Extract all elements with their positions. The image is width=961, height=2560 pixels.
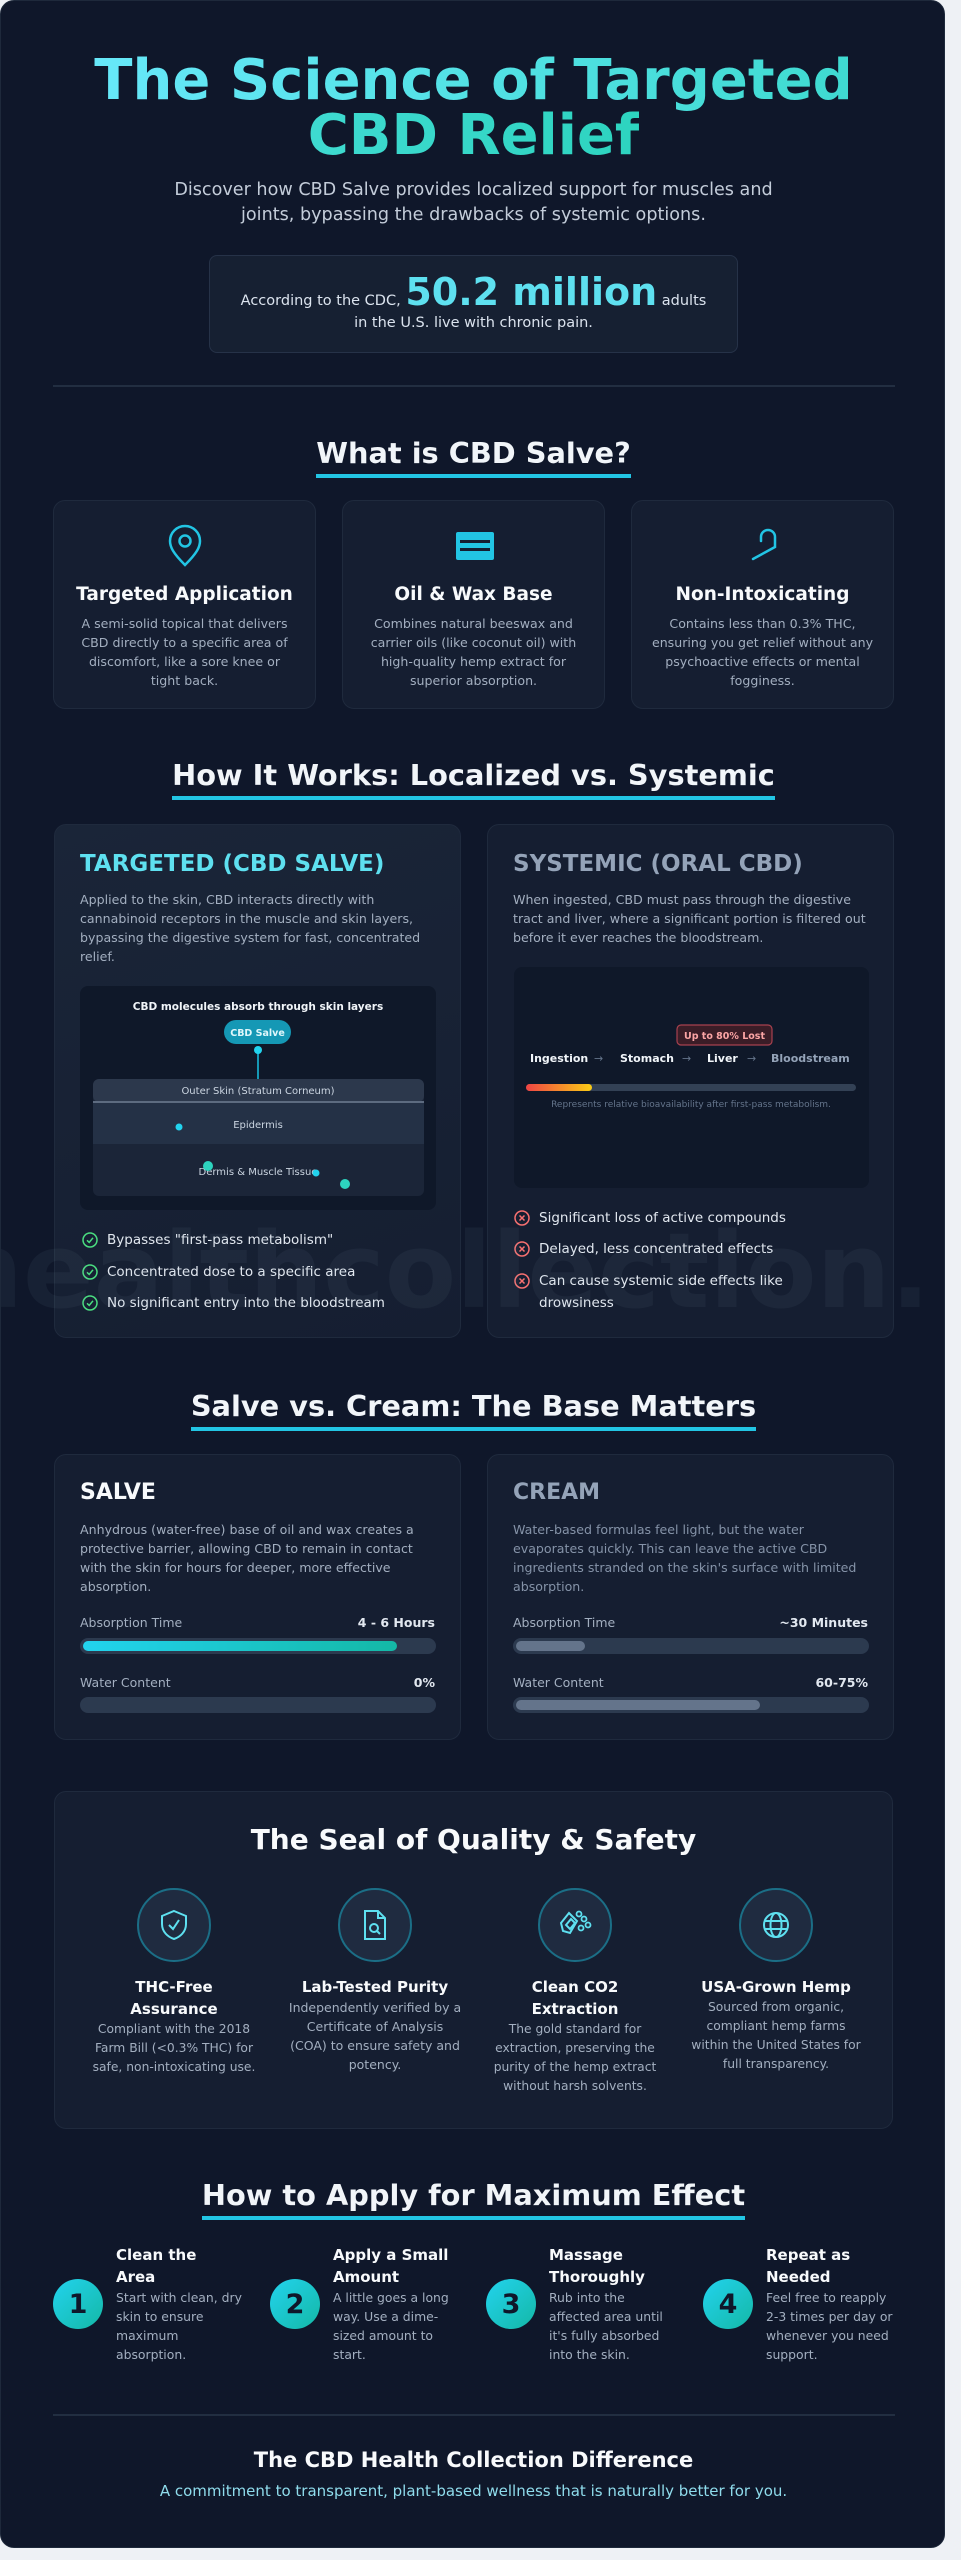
step 3 <box>486 2246 663 2362</box>
seal item: thc-free: Compliant with the 2018 Farm Bill (<0.3% THC) for safe, non-intoxicating use. <box>93 2022 255 2074</box>
footer <box>160 2448 787 2500</box>
heading: salve vs cream: Salve vs. Cream: The Base Matters <box>191 1389 756 1423</box>
step 4 <box>703 2246 892 2362</box>
panel: targeted: TARGETED (CBD SALVE) <box>80 851 384 877</box>
step 3: Rub into the affected area until it's fully absorbed into the skin. <box>549 2290 663 2362</box>
panel: targeted <box>54 824 461 1338</box>
panel: salve <box>54 1454 461 1740</box>
bioavailability diagram: → <box>747 1052 756 1065</box>
icon: lab document <box>338 1888 412 1962</box>
bioavailability diagram: Stomach <box>620 1052 674 1065</box>
heading: how to apply: How to Apply for Maximum Effect <box>202 2178 745 2212</box>
card: oil & wax base: Oil & Wax Base <box>394 584 553 605</box>
step 4: 4 <box>719 2288 737 2320</box>
icon: co2 extraction <box>538 1888 612 1962</box>
skin diagram: Epidermis <box>233 1120 283 1131</box>
step 2 <box>270 2246 449 2362</box>
bioavailability diagram: Up to 80% Lost <box>684 1031 765 1042</box>
skin diagram: Dermis & Muscle Tissue <box>199 1167 317 1178</box>
seal item: thc-free: Assurance <box>130 2000 218 2018</box>
stat callout <box>209 255 738 353</box>
step 2: Apply a Small Amount <box>333 2246 448 2286</box>
bar: water content <box>80 1675 435 1690</box>
bioavailability diagram: → <box>682 1052 691 1065</box>
bar: absorption time: ~30 Minutes <box>779 1615 868 1630</box>
seal item: thc-free: THC-Free <box>135 1978 213 1996</box>
card: non-intoxicating: Non-Intoxicating <box>676 584 849 605</box>
step 1: Clean the <box>116 2246 196 2264</box>
skin diagram: Outer Skin (Stratum Corneum) <box>181 1086 335 1097</box>
bioavailability diagram: Represents relative bioavailability after first-pass metabolism. <box>551 1100 831 1110</box>
bar: water content: Water Content <box>80 1675 171 1690</box>
bar: absorption time <box>80 1615 435 1630</box>
card: oil & wax base: Combines natural beeswax and carrier oils (like coconut oil) with high-quality hemp extract for superior absorption. <box>371 616 576 688</box>
card: non-intoxicating: Contains less than 0.3% THC, ensuring you get relief without any psychoactive effects or mental fogginess. <box>652 616 873 688</box>
step 3: Massage Thoroughly <box>549 2246 645 2286</box>
card: non-intoxicating <box>631 500 894 709</box>
seal item: lab tested: Lab-Tested Purity <box>302 1978 448 1996</box>
skin diagram <box>80 986 436 1210</box>
icon: pin <box>168 524 202 567</box>
icon: globe <box>739 1888 813 1962</box>
panel: seal of quality <box>54 1791 893 2129</box>
panel: cream: CREAM <box>513 1480 600 1505</box>
bioavailability diagram: → <box>594 1052 603 1065</box>
icon: layers <box>456 532 494 560</box>
seal item: co2: Extraction <box>532 2000 618 2018</box>
title: CBD Relief <box>308 103 639 168</box>
stat callout: in the U.S. live with chronic pain. <box>354 315 593 331</box>
panel: systemic: When ingested, CBD must pass through the digestive tract and liver, where a significant portion is filtered out before it ever reaches the bloodstream. <box>513 892 866 945</box>
step 1 <box>53 2246 242 2362</box>
skin diagram: CBD Salve <box>230 1028 285 1039</box>
bar: water content: 0% <box>414 1675 435 1690</box>
panel: targeted: Applied to the skin, CBD interacts directly with cannabinoid receptors in the muscle and skin layers, bypassing the digestive system for fast, concentrated relief. <box>80 892 420 964</box>
seal item: co2: The gold standard for extraction, preserving the purity of the hemp extract without harsh solvents. <box>494 2022 656 2093</box>
seal item: usa hemp: USA-Grown Hemp <box>701 1978 851 1996</box>
card: targeted application: Targeted Application <box>76 584 293 605</box>
seal item: co2: Clean CO2 <box>532 1978 618 1996</box>
card: targeted application: A semi-solid topical that delivers CBD directly to a specific area of discomfort, like a sore knee or tight back. <box>81 616 288 688</box>
step 4: Feel free to reapply 2-3 times per day or whenever you need support. <box>766 2290 892 2362</box>
panel: cream: Water-based formulas feel light, but the water evaporates quickly. This can leave the active CBD ingredients stranded on the skin's surface with limited absorption. <box>513 1522 856 1594</box>
skin diagram: CBD molecules absorb through skin layers <box>133 1001 383 1013</box>
footer: A commitment to transparent, plant-based wellness that is naturally better for you. <box>160 2482 787 2500</box>
panel: systemic: Delayed, less concentrated effects <box>539 1241 773 1257</box>
panel: salve: Anhydrous (water-free) base of oil and wax creates a protective barrier, allowing CBD to remain in contact with the skin for hours for deeper, more effective absorption. <box>80 1522 414 1594</box>
footer: The CBD Health Collection Difference <box>254 2448 693 2472</box>
step 1: Area <box>116 2268 155 2286</box>
title <box>94 48 853 168</box>
seal item: lab tested: Independently verified by a Certificate of Analysis (COA) to ensure safety and potency. <box>289 2000 461 2072</box>
panel: targeted: Concentrated dose to a specific area <box>107 1264 355 1280</box>
panel: targeted: No significant entry into the bloodstream <box>107 1295 385 1311</box>
heading: how it works: How It Works: Localized vs. Systemic <box>172 758 775 792</box>
benefit list: Bypasses "first-pass metabolism" <box>107 1232 333 1248</box>
step 2: A little goes a long way. Use a dime-sized amount to start. <box>333 2290 449 2362</box>
drawback list: Significant loss of active compounds <box>539 1210 786 1226</box>
subtitle: Discover how CBD Salve provides localized support for muscles and joints, bypassing the drawbacks of systemic options. <box>174 180 773 225</box>
panel: systemic <box>487 824 894 1338</box>
icon: hook <box>752 528 776 560</box>
step 4: Repeat as Needed <box>766 2246 850 2286</box>
panel: seal of quality: The Seal of Quality & Safety <box>251 1823 696 1856</box>
icon: shield <box>137 1888 211 1962</box>
card: targeted application <box>53 500 316 709</box>
bioavailability diagram <box>514 967 869 1188</box>
bar: absorption time: 4 - 6 Hours <box>358 1615 435 1630</box>
bar: water content: Water Content <box>513 1675 604 1690</box>
step 2: 2 <box>286 2288 304 2320</box>
card: oil & wax base <box>342 500 605 709</box>
bar: absorption time: Absorption Time <box>80 1615 182 1630</box>
panel: cream <box>487 1454 894 1740</box>
stat callout: According to the CDC, 50.2 million adults <box>241 270 706 314</box>
bioavailability diagram: Bloodstream <box>771 1052 850 1065</box>
bar: water content: 60-75% <box>815 1675 868 1690</box>
step 3: 3 <box>502 2288 520 2320</box>
bioavailability diagram: Liver <box>707 1052 738 1065</box>
bar: absorption time: Absorption Time <box>513 1615 615 1630</box>
heading: what is cbd salve: What is CBD Salve? <box>316 436 631 470</box>
panel: systemic: Can cause systemic side effects like drowsiness <box>539 1273 783 1311</box>
step 1: Start with clean, dry skin to ensure maximum absorption. <box>116 2290 242 2362</box>
panel: salve: SALVE <box>80 1480 156 1505</box>
seal item: usa hemp: Sourced from organic, compliant hemp farms within the United States for full transparency. <box>691 2000 861 2071</box>
seal item: thc-free <box>93 1978 255 2074</box>
panel: systemic: SYSTEMIC (ORAL CBD) <box>513 851 803 877</box>
step 1: 1 <box>69 2288 87 2320</box>
seal item: co2 <box>494 1978 656 2093</box>
bioavailability diagram: Ingestion <box>530 1052 588 1065</box>
title: The Science of Targeted <box>94 48 853 113</box>
bar: absorption time <box>513 1615 868 1630</box>
bar: water content <box>513 1675 868 1690</box>
